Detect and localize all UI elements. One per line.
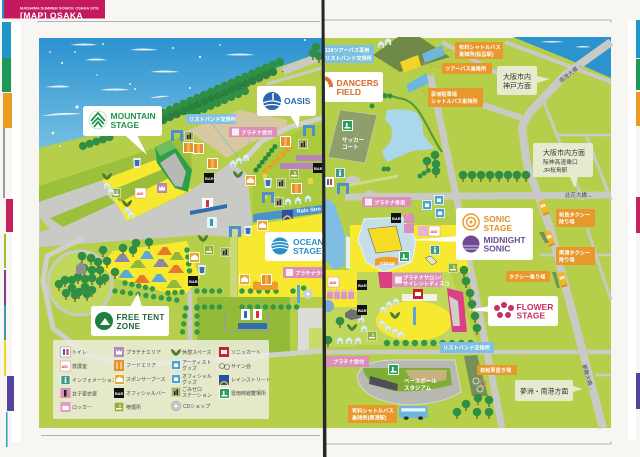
callout: sonic stage and midnight sonic: STAGE [484, 223, 512, 233]
map icons: platinum [157, 183, 167, 193]
label: platinum reception: プラチナ受付 [241, 128, 273, 136]
flower stage tree line [460, 266, 481, 335]
callout: free tent zone: ZONE [116, 322, 141, 331]
map text: aid labels: AID [430, 229, 438, 234]
legend: official bar: オフィシャルバー [126, 391, 166, 397]
label: bicycle parking: 自転車置き場 [480, 366, 512, 374]
map icons: bar: BAR [358, 283, 367, 288]
legend: platinum area [114, 347, 161, 357]
label: tour bus wristband [324, 45, 374, 63]
flower stage tents [379, 298, 404, 338]
tent zone forest [55, 238, 153, 302]
legend: signing session: サイン会 [231, 363, 251, 370]
legend: cd shop [171, 401, 210, 411]
callout: ocean stage [265, 232, 324, 261]
shore and oasis access roads [267, 56, 322, 84]
legend panel [53, 340, 271, 419]
baseball stadium: スタジアム [404, 384, 432, 392]
label: platinum salon: プラチナサロン/ [403, 274, 441, 282]
south shuttle bus [399, 406, 428, 420]
label: tour bus wristband: リストバンド交換所 [325, 54, 373, 62]
label: wristband exchange north: リストバンド交換所 [189, 115, 237, 123]
legend: artist goods: アーティスト [182, 360, 211, 366]
label: tour bus stop [442, 63, 492, 74]
tree row: konohana road [459, 171, 530, 182]
tents [114, 247, 184, 288]
map text: aid labels: AID [136, 191, 144, 196]
small parking grass [40, 218, 50, 232]
legend: toilet [60, 347, 87, 357]
callout: sonic stage and midnight sonic: MIDNIGHT [484, 235, 526, 245]
darker grass band: mountain side [39, 132, 192, 202]
callout: dancers field: FIELD [336, 87, 361, 97]
free tent yellow ground [100, 241, 200, 293]
legend: first aid: AID [62, 365, 68, 369]
leader lines [420, 50, 455, 97]
sea: left [39, 38, 322, 148]
map icons: bar: BAR [358, 308, 367, 313]
label: nanko taxi drop: 降り場 [559, 256, 575, 264]
legend: first aid: 救護室 [72, 363, 87, 370]
map icons: goods [422, 195, 445, 218]
flower side tents and trees [324, 309, 367, 347]
legend: women's changing room: 女子更衣室 [72, 390, 97, 398]
legend: information [60, 375, 117, 385]
direction callout: osaka city: JR桜島駅 [543, 166, 568, 174]
label: paid shuttle bus nanko: 有料シャトルバス [352, 406, 394, 414]
flower stage building [447, 288, 467, 332]
label: paid shuttle bus sakurajima [455, 42, 503, 59]
soccer court: コート [342, 144, 359, 151]
toilet block frame [225, 311, 268, 331]
legend: rest space [171, 349, 211, 356]
legend: lockers [60, 402, 92, 412]
direction callout: osaka city [533, 143, 593, 188]
map icons: bar: BAR [205, 176, 214, 181]
sonic stadium [358, 217, 416, 272]
callout: mountain stage [83, 106, 162, 155]
label: platinum reception south [325, 356, 369, 367]
legend: cd shop: CDショップ [183, 404, 210, 410]
map icon: information [430, 245, 440, 255]
ocean walkway [230, 225, 237, 350]
oasis hedge [256, 144, 277, 170]
legend: sonic cart: ソニッカート [231, 350, 261, 356]
label: paid shuttle bus nanko [348, 405, 397, 423]
legend: official goods [171, 374, 212, 386]
legend: food area: フードエリア [126, 363, 156, 369]
baseball stadium [357, 360, 461, 405]
legend: evacuation site: 雷雨時避難場所 [231, 390, 266, 397]
legend: artist goods [171, 360, 211, 372]
trees near top right of left page [309, 43, 323, 63]
map icon: sign session [425, 256, 437, 265]
direction callout: yumeshima nanko: 夢洲・南港方面 [520, 386, 568, 396]
legend: zero waste station: ステーション [182, 393, 212, 399]
label: paid shuttle bus nanko: 乗降所(南港駅) [352, 414, 387, 422]
map base: grass [39, 38, 611, 428]
lake trees [423, 151, 440, 178]
left index tabs [2, 22, 21, 447]
callout: mountain stage: STAGE [110, 120, 139, 130]
map icons: bar: BAR [189, 279, 198, 284]
tent forest ring [48, 251, 112, 315]
mountain yellow ground stripe [110, 169, 173, 202]
legend: zero waste station: ごみゼロ [182, 386, 202, 393]
mountain stage structure [155, 140, 192, 192]
map icons: aid [135, 188, 440, 287]
label: paid shuttle bus sakurajima: 乗降所(桜島駅) [459, 50, 494, 58]
map icons: food [183, 136, 302, 285]
rain street strip [253, 205, 322, 222]
flower stage centre stick [413, 307, 416, 325]
baseball stadium: ベースボール [404, 377, 437, 385]
soccer court: サッカー [342, 137, 364, 144]
oasis lawn [252, 124, 322, 217]
ocean stage yellow ground [238, 214, 322, 297]
right index tabs [628, 20, 640, 440]
toilet block shop [238, 323, 267, 329]
sea-side tree rows [83, 60, 284, 146]
direction callout: osaka city: 大阪市内方面 [543, 148, 585, 157]
label: tour bus wristband: 119ツアーバス専用 [325, 46, 369, 54]
label: yumeshima parking shuttle: シャトルバス乗降所 [431, 97, 479, 105]
label: platinum salon [392, 273, 449, 288]
dancers area buildings [325, 168, 375, 196]
oasis road [244, 118, 322, 160]
oasis purple stalls [280, 155, 322, 169]
legend: official bar: BAR [115, 392, 123, 396]
label: taxi stand [506, 271, 550, 282]
map text: aid labels [136, 191, 438, 285]
map text: aid labels: AID [330, 280, 336, 285]
callout: flower stage: STAGE [516, 310, 545, 320]
label: wristband exchange south [440, 342, 494, 353]
oasis white tents [275, 195, 311, 205]
map icons: bar: BAR [392, 216, 401, 221]
label: wristband exchange south: リストバンド交換所 [443, 344, 491, 352]
direction callout: osaka city kobe: 大阪市内 [503, 72, 531, 81]
callout: mountain stage: MOUNTAIN [110, 111, 156, 121]
sea: right [513, 37, 611, 78]
label: nanko taxi drop: 南港タクシー [559, 248, 590, 256]
legend: platinum area: プラチナエリア [126, 350, 161, 356]
label: platinum only: プラチナ専用 [374, 198, 405, 206]
map icons: sponsor booths [189, 175, 268, 285]
label: sakurajima taxi drop: 桜島タクシー [559, 210, 590, 218]
label: platinum only [362, 197, 411, 216]
callout: sonic stage and midnight sonic: SONIC [484, 214, 510, 224]
legend: rest space: 休憩スペース [182, 349, 211, 356]
callout: oasis: OASIS [284, 96, 311, 106]
lower grass block [197, 297, 290, 353]
map icon: blue stick [297, 285, 300, 303]
callout: free tent zone: FREE TENT [116, 313, 165, 322]
sonic yellow ground [350, 225, 470, 272]
taxi bay strip [539, 232, 560, 288]
direction callout: osaka city: 阪神高速乗口 [543, 158, 578, 166]
pink booths [327, 289, 354, 299]
label: yumeshima parking shuttle [428, 88, 483, 107]
label: platinum lounge [283, 267, 326, 278]
map icons: gates [171, 125, 315, 237]
white tents: parking [378, 38, 391, 48]
label: platinum lounge: プラチナラウ [295, 270, 326, 277]
legend: toilet: トイレ [72, 350, 87, 356]
callout: dancers field: DANCERS [336, 78, 379, 88]
flower stage yellow ground [376, 301, 452, 341]
legend: smoking [114, 402, 141, 412]
map icons: bar: BAR [314, 166, 323, 171]
taxis [538, 199, 568, 288]
label: taxi stand: タクシー乗り場 [509, 272, 546, 280]
legend: rain street: レインストリート [231, 378, 271, 384]
flower bushes [387, 340, 473, 346]
map icons: rest stations [184, 131, 308, 257]
tent path [188, 290, 192, 340]
perimeter road [43, 238, 322, 365]
map icons: lockers [404, 214, 428, 236]
sand plaza [188, 110, 287, 158]
direction callout: yumeshima nanko [515, 380, 583, 401]
oasis food stalls [264, 146, 292, 172]
callout: flower stage [468, 296, 558, 326]
sea sparkles and wave strokes [42, 39, 591, 147]
legend: sonic cart [219, 347, 261, 357]
lawn around flower stage [357, 272, 478, 345]
north buses [400, 45, 445, 93]
lower centre road block [298, 308, 322, 352]
legend: official bar [114, 388, 166, 398]
road label: yume-mai bridge: 夢舞大橋→ [580, 363, 596, 392]
legend: information: インフォメーション [72, 378, 117, 384]
callout: ocean stage: STAGE [293, 246, 322, 256]
map icons: rest area leaves [102, 171, 400, 331]
legend: signing session [220, 363, 251, 370]
bushes: tent zone edge [115, 250, 304, 336]
header band: map title: [MAP] OSAKA [20, 10, 83, 20]
centre spine [322, 0, 326, 457]
mountain stage yellow ground [102, 160, 192, 221]
bicycle parking [464, 355, 488, 396]
callout: dancers field [324, 72, 383, 102]
parking grass strip [50, 195, 115, 227]
rain street strip: Rain Stre [297, 206, 321, 215]
direction callout: osaka city kobe [497, 66, 550, 95]
legend: artist goods: グッズ [182, 365, 197, 372]
label: platinum reception south: プラチナ受付 [333, 358, 365, 366]
legend: food area [114, 360, 156, 371]
map icon: cd shop [303, 289, 313, 299]
label: sakurajima taxi drop: 降り場 [559, 218, 575, 226]
soccer court [328, 110, 377, 163]
legend: first aid [60, 361, 87, 371]
legend: sponsor booth [114, 374, 165, 385]
callout: oasis [257, 86, 316, 128]
legend: official goods: オフィシャル [182, 374, 212, 380]
map icons: bar [188, 163, 401, 315]
callout: sonic stage and midnight sonic [410, 208, 533, 260]
label: nanko taxi drop [556, 247, 595, 265]
label: platinum salon: サイレントディスコ [403, 280, 449, 288]
callout: ocean stage: OCEAN [293, 237, 324, 247]
legend: smoking: 喫煙所 [126, 404, 141, 411]
callout: free tent zone [91, 293, 169, 336]
label: tour bus stop: ツアーバス乗降所 [445, 64, 487, 72]
lake with path [378, 92, 442, 162]
plaza and parking roads: left [39, 163, 253, 247]
legend: zero waste station [171, 386, 212, 399]
legend: sponsor booth: スポンサーブース [126, 376, 165, 383]
callout: flower stage: FLOWER [516, 302, 553, 312]
label: sakurajima taxi drop [556, 209, 595, 227]
label: paid shuttle bus sakurajima: 有料シャトルバス [459, 43, 501, 51]
parking field: top [373, 37, 450, 72]
map icons: smoking [111, 169, 458, 341]
legend: lockers: ロッカー [72, 405, 92, 411]
road label: konohana bridge: 此花大橋→ [565, 191, 593, 199]
legend: rain street [219, 375, 271, 385]
map icons: drink cups [133, 158, 272, 275]
label: wristband exchange north [186, 114, 238, 157]
bushes near lake [372, 96, 432, 176]
flower stage white band [402, 294, 437, 301]
right map: roads [325, 42, 611, 428]
platinum salon building [378, 272, 392, 288]
map icon: sonic cart [413, 289, 423, 299]
callout: sonic stage and midnight sonic: SONIC [484, 244, 510, 254]
trees by bicycle parking [453, 394, 493, 419]
map icons: white tents [104, 154, 249, 218]
road label: nanko bridge: 南港大橋→ [557, 61, 584, 85]
map icons: shelters [399, 251, 410, 262]
header band: map title [2, 0, 105, 20]
lake-side path [345, 176, 398, 186]
pond [322, 300, 334, 312]
legend: evacuation site [219, 388, 266, 399]
sonic stadium: STAGE [380, 261, 395, 266]
legend: official goods: グッズ [182, 379, 197, 386]
legend: women's changing room [60, 388, 97, 398]
label: bicycle parking [477, 365, 517, 375]
ocean stalls [253, 280, 278, 290]
label: yumeshima parking shuttle: 夢洲駐車場 [431, 90, 458, 98]
blue inlet and white structure [325, 197, 351, 270]
direction callout: osaka city kobe: 神戸方面 [503, 81, 531, 90]
oasis yellow stalls [262, 174, 313, 199]
label: platinum reception [229, 127, 277, 146]
map icon: blue shop [190, 204, 227, 215]
map icons: toilets [202, 198, 262, 320]
header band: map title: MAISHIMA SUMMER SONICK OSAKA SITE [20, 6, 99, 10]
